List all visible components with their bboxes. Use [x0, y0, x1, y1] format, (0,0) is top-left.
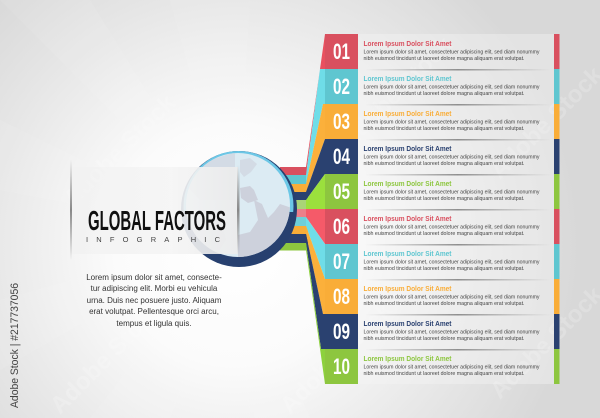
accent bar 10 — [554, 349, 560, 384]
watermark: Adobe Stock — [335, 31, 458, 154]
row 08 — [325, 279, 560, 314]
row 02: nibh euismod tincidunt ut laoreet dolore magna aliquam erat volutpat. — [364, 91, 524, 97]
globe light blue rim — [184, 151, 294, 212]
globe continents — [202, 153, 290, 257]
watermark: Adobe Stock — [275, 296, 398, 418]
row 04: nibh euismod tincidunt ut laoreet dolore magna aliquam erat volutpat. — [364, 161, 524, 167]
globe — [181, 151, 297, 267]
watermark: Adobe Stock — [45, 296, 168, 418]
description text: urna. Duis nec posuere justo. Aliquam — [87, 296, 222, 305]
row 08: Lorem ipsum dolor sit amet, consectetuer adipiscing elit, sed diam nonummy — [364, 295, 540, 301]
globe outer ring — [181, 151, 297, 267]
row 01: nibh euismod tincidunt ut laoreet dolore magna aliquam erat volutpat. — [364, 56, 524, 62]
side credit text: Adobe Stock | #217737056 — [9, 283, 21, 408]
accent bar 02 — [554, 69, 560, 104]
row text 09: Lorem Ipsum Dolor Sit Amet — [364, 321, 452, 328]
row text 02: Lorem Ipsum Dolor Sit Amet — [364, 76, 452, 83]
row text 08: Lorem Ipsum Dolor Sit Amet — [364, 286, 452, 293]
row 03: 03 — [333, 109, 350, 134]
row 09 — [325, 314, 560, 349]
row 03: nibh euismod tincidunt ut laoreet dolore magna aliquam erat volutpat. — [364, 126, 524, 132]
description text — [86, 273, 222, 328]
row 01 — [325, 34, 560, 69]
number box 05 — [325, 174, 358, 209]
description text: erat volutpat. Pellentesque orci arcu, — [89, 307, 219, 316]
accent bar 03 — [554, 104, 560, 139]
description text: tur adipiscing elit. Morbi eu vehicula — [91, 284, 218, 293]
row 03 — [325, 104, 560, 139]
number box 09 — [325, 314, 358, 349]
description text: Lorem ipsum dolor sit amet, consecte- — [86, 273, 222, 282]
row 02: Lorem ipsum dolor sit amet, consectetuer adipiscing elit, sed diam nonummy — [364, 85, 540, 91]
row 10: Lorem ipsum dolor sit amet, consectetuer adipiscing elit, sed diam nonummy — [364, 365, 540, 371]
row text 07: Lorem Ipsum Dolor Sit Amet — [364, 251, 452, 258]
row 07: 07 — [333, 249, 350, 274]
row 08: nibh euismod tincidunt ut laoreet dolore magna aliquam erat volutpat. — [364, 301, 524, 307]
number box 06 — [325, 209, 358, 244]
row 01: 01 — [333, 39, 350, 64]
accent bar 01 — [554, 34, 560, 69]
content panel — [358, 34, 554, 384]
description text: tempus et ligula quis. — [116, 319, 192, 328]
row 08: 08 — [333, 284, 350, 309]
row 02 — [325, 69, 560, 104]
title panel — [70, 160, 240, 260]
number box 04 — [325, 139, 358, 174]
accent bar 09 — [554, 314, 560, 349]
number box 02 — [325, 69, 358, 104]
row 09: 09 — [333, 319, 350, 344]
number box 03 — [325, 104, 358, 139]
row 06: Lorem ipsum dolor sit amet, consectetuer adipiscing elit, sed diam nonummy — [364, 225, 540, 231]
row 06: 06 — [333, 214, 350, 239]
accent bar 07 — [554, 244, 560, 279]
row text 03: Lorem Ipsum Dolor Sit Amet — [364, 111, 452, 118]
row 07: nibh euismod tincidunt ut laoreet dolore magna aliquam erat volutpat. — [364, 266, 524, 272]
row text 01: Lorem Ipsum Dolor Sit Amet — [364, 41, 452, 48]
row 04: Lorem ipsum dolor sit amet, consectetuer adipiscing elit, sed diam nonummy — [364, 155, 540, 161]
watermark: Adobe Stock — [58, 89, 181, 212]
row 05: Lorem ipsum dolor sit amet, consectetuer adipiscing elit, sed diam nonummy — [364, 190, 540, 196]
row 03: Lorem ipsum dolor sit amet, consectetuer adipiscing elit, sed diam nonummy — [364, 120, 540, 126]
accent bar 06 — [554, 209, 560, 244]
accent bar 04 — [554, 139, 560, 174]
row text 10: Lorem Ipsum Dolor Sit Amet — [364, 356, 452, 363]
row 02: 02 — [333, 74, 350, 99]
row 10: nibh euismod tincidunt ut laoreet dolore magna aliquam erat volutpat. — [364, 371, 524, 377]
number box 07 — [325, 244, 358, 279]
row 05: 05 — [333, 179, 350, 204]
row 10: 10 — [333, 354, 350, 379]
row 05 — [325, 174, 560, 209]
title: GLOBAL FACTORS — [88, 205, 226, 236]
row 09: nibh euismod tincidunt ut laoreet dolore magna aliquam erat volutpat. — [364, 336, 524, 342]
row text 04: Lorem Ipsum Dolor Sit Amet — [364, 146, 452, 153]
row 05: nibh euismod tincidunt ut laoreet dolore magna aliquam erat volutpat. — [364, 196, 524, 202]
fan connectors — [306, 34, 330, 384]
accent bar 08 — [554, 279, 560, 314]
number box 01 — [325, 34, 358, 69]
row 04 — [325, 139, 560, 174]
row text 05: Lorem Ipsum Dolor Sit Amet — [364, 181, 452, 188]
number box 10 — [325, 349, 358, 384]
accent bar 05 — [554, 174, 560, 209]
row 06 — [325, 209, 560, 244]
row 10 — [325, 349, 560, 384]
row text 06: Lorem Ipsum Dolor Sit Amet — [364, 216, 452, 223]
row 07: Lorem ipsum dolor sit amet, consectetuer adipiscing elit, sed diam nonummy — [364, 260, 540, 266]
subtitle: INFOGRAPHIC — [86, 235, 221, 244]
row 04: 04 — [333, 144, 351, 169]
row 06: nibh euismod tincidunt ut laoreet dolore magna aliquam erat volutpat. — [364, 231, 524, 237]
row 07 — [325, 244, 560, 279]
globe ocean — [186, 153, 290, 257]
row 01: Lorem ipsum dolor sit amet, consectetuer adipiscing elit, sed diam nonummy — [364, 50, 540, 56]
row 09: Lorem ipsum dolor sit amet, consectetuer adipiscing elit, sed diam nonummy — [364, 330, 540, 336]
connector stripes — [280, 167, 308, 250]
number box 08 — [325, 279, 358, 314]
